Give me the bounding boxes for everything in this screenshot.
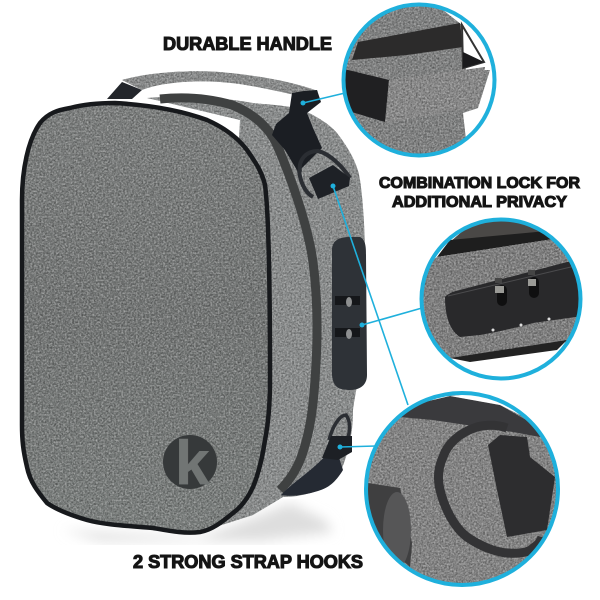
- front panel: [22, 103, 270, 533]
- ground shadow: [62, 503, 333, 541]
- lower strap: [281, 445, 343, 496]
- connector: lock: [360, 308, 422, 328]
- lower D ring: [322, 415, 352, 460]
- upper D ring: [299, 151, 350, 199]
- inset: lock detail: [415, 220, 590, 378]
- side seam: [160, 98, 317, 490]
- connector: strap hook upper: [330, 184, 408, 405]
- connector: handle: [300, 93, 345, 106]
- combination lock: [332, 237, 367, 390]
- logo: k: [175, 429, 210, 498]
- handle: [107, 71, 318, 99]
- inset: strap hook detail: [364, 391, 560, 587]
- label: durable handle: DURABLE HANDLE: [163, 34, 332, 54]
- upper webbing and buckle: [272, 90, 322, 172]
- label: combination lock: [379, 175, 580, 211]
- label: combination lock: ADDITIONAL PRIVACY: [392, 194, 568, 211]
- logo: [163, 429, 217, 498]
- bag illustration: [22, 71, 367, 533]
- label: strap hooks: 2 STRONG STRAP HOOKS: [133, 552, 363, 572]
- connector: strap hook lower: [338, 444, 376, 450]
- side panel: [147, 97, 365, 532]
- inset: handle detail: [335, 2, 494, 165]
- label: combination lock: COMBINATION LOCK FOR: [379, 175, 580, 192]
